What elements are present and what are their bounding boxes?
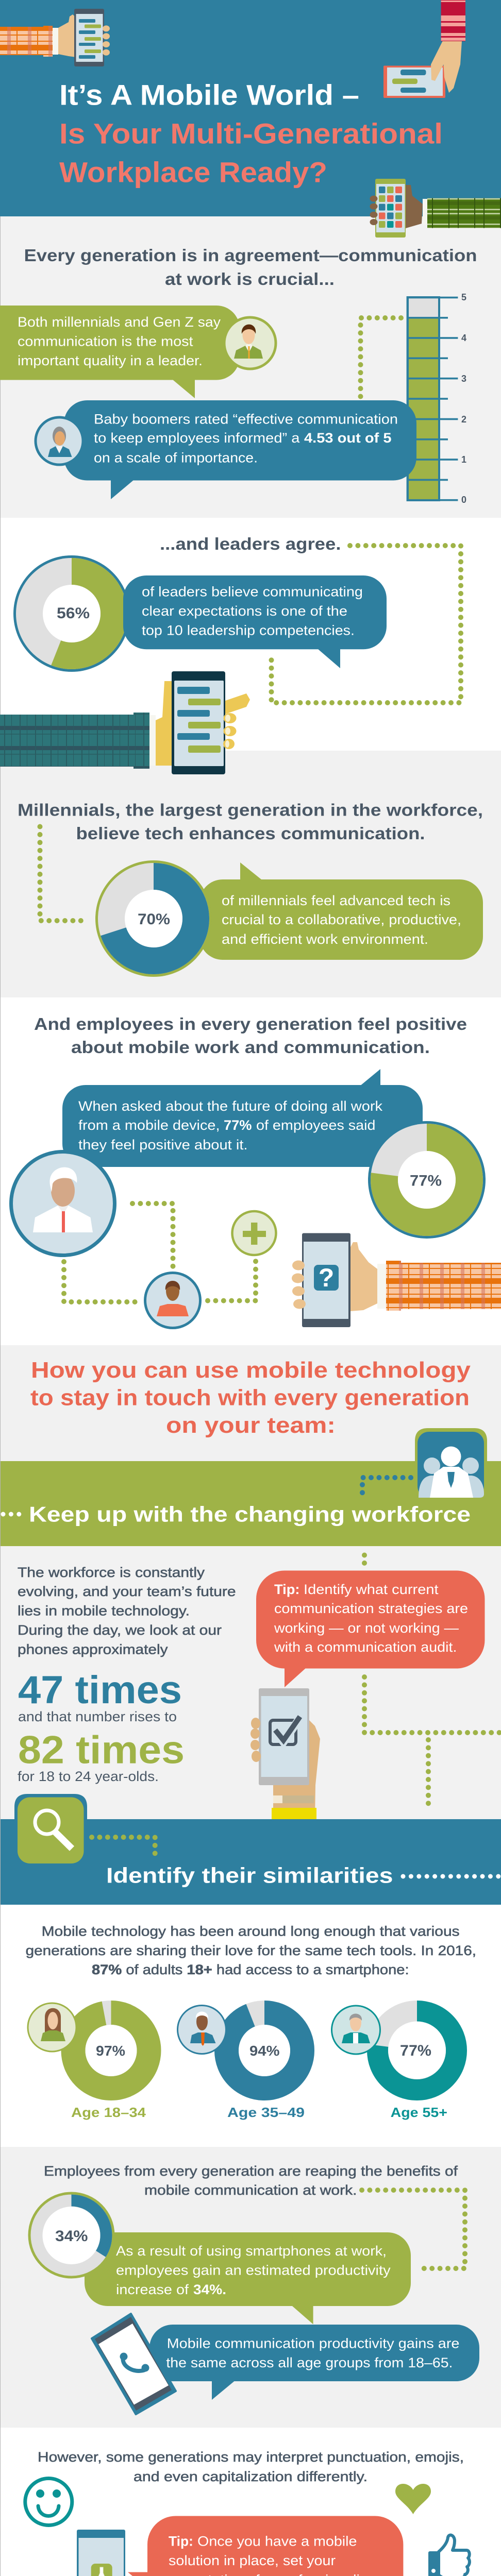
donut chart: age 55+ 77 percent [332,2001,467,2120]
donut chart: 77 percent [368,1121,486,1239]
icon: heart [395,2484,431,2514]
dotted connector: magnifier to heading [92,1837,155,1861]
icon: thumbs up [428,2535,470,2576]
callout: tip professionalism: solution in place, set your [169,2553,336,2568]
text block: mobile technology sharing [26,1924,476,1977]
callout: millennials advanced tech: and efficient work environment. [222,931,428,947]
text block: the workforce is evolving: During the day, we look at our [18,1622,222,1638]
callout: baby boomers: 4.53 out of 5 [304,430,392,446]
callout: tip professionalism [128,2516,403,2576]
callout: millennials advanced tech: crucial to a collaborative, productive, [222,912,461,927]
icon: young woman avatar [28,2003,76,2052]
text block: the workforce is evolving: The workforce is constantly [18,1565,205,1580]
heading: how you can use mobile technology [30,1358,471,1438]
donut chart: age 18-34 97 percent [28,2001,161,2120]
heading: how you can use mobile technology: How you can use mobile technology [31,1358,471,1383]
icon: man avatar with tie [177,2005,226,2054]
callout: productivity increase: 34%. [193,2282,226,2297]
text block: mobile technology sharing: 87% of adults 18+ had access to a smartphone: [92,1962,409,1977]
callout: same across age groups: Mobile communication productivity gains are [167,2336,460,2351]
callout: future of mobile work: from a mobile device, [78,1117,220,1133]
callout: future of mobile work [62,1069,423,1167]
heading: how you can use mobile technology: to stay in touch with every generation [30,1385,470,1411]
donut chart: age 55+ 77 percent: Age 55+ [391,2105,447,2120]
heading: every generation agrees [24,246,477,289]
heading: employees feel positive about mobile work [34,1014,467,1057]
heading: generations interpret differently [38,2449,464,2484]
icon: older man avatar teal [332,2006,380,2054]
chart: importance thermometer scale 0 to 5: 1 [461,454,466,465]
donut chart: 70 percent: 70% [138,911,170,928]
statistic: 82 times: for 18 to 24 year-olds. [18,1769,159,1784]
illustration: hand with striped sleeve holding phone [0,2530,125,2576]
callout: productivity increase [85,2232,411,2324]
callout: future of mobile work: of employees said [256,1117,375,1133]
icon: older woman avatar [36,417,83,465]
statistic: 47 times: 47 times [18,1668,182,1712]
icon: people team badge [415,1428,487,1498]
heading: generations interpret differently: However, some generations may interpret punctuation, emojis, [38,2449,464,2465]
dotted connector: thermometer to callout [361,318,401,397]
donut chart: age 55+ 77 percent: 77% [400,2042,431,2059]
chart: importance thermometer scale 0 to 5: 4 [461,333,466,343]
callout: productivity increase: As a result of using smartphones at work, [116,2243,387,2259]
illustration: hand with teal plaid sleeve holding chat phone [0,671,250,774]
callout: tip professionalism: Tip: [169,2533,193,2549]
illustration: dark hand with green plaid sleeve holding app phone [370,179,501,238]
callout: leaders believe: clear expectations is one of the [142,603,347,619]
heading: employees reaping benefits [44,2163,458,2198]
callout: millennials and Gen Z: important quality in a leader. [18,353,203,368]
donut chart: 77 percent: 77% [410,1173,442,1189]
icon: older man avatar [11,1152,114,1255]
heading: employees reaping benefits: Employees from every generation are reaping the benefits of [44,2163,458,2179]
heading: millennials believe tech enhances communication [18,801,483,843]
callout: millennials and Gen Z [0,306,240,398]
chart: importance thermometer scale 0 to 5: 2 [461,414,466,425]
text block: mobile technology sharing: Mobile technology has been around long enough that various [42,1924,460,1939]
callout: tip communication audit: communication strategies are [274,1601,468,1616]
heading: millennials believe tech enhances communication: Millennials, the largest generation in the workforce, [18,801,483,819]
donut chart: 56 percent: 56% [57,605,90,622]
illustration: hand with striped red sleeve holding tablet [383,0,465,98]
callout: future of mobile work: they feel positive about it. [78,1137,247,1153]
illustration: hand with orange plaid sleeve holding phone [0,9,110,66]
dotted connector: millennials heading to donut [40,826,88,921]
callout: future of mobile work: When asked about the future of doing all work [78,1098,383,1114]
callout: millennials and Gen Z: communication is the most [18,333,193,349]
callout: productivity increase: employees gain an estimated productivity [116,2263,391,2278]
callout: baby boomers: on a scale of importance. [94,450,258,466]
callout: baby boomers: Baby boomers rated “effective communication [94,411,398,427]
heading: employees reaping benefits: mobile communication at work. [144,2182,357,2198]
donut chart: 34 percent [28,2192,114,2278]
donut chart: 34 percent: 34% [55,2228,88,2245]
statistic: 47 times: and that number rises to [18,1709,177,1724]
chart: importance thermometer scale 0 to 5 [407,292,466,505]
callout: tip professionalism: Once you have a mobile [197,2533,357,2549]
callout: leaders believe: of leaders believe communicating [142,584,363,600]
title: It’s A Mobile World – [59,79,359,111]
callout: same across age groups [149,2325,479,2400]
illustration: hand with orange plaid sleeve holding question phone: ? [319,1263,334,1292]
callout: leaders believe [123,575,387,668]
icon: tilted phone with handset [92,2314,176,2414]
callout: future of mobile work: 77% [224,1117,252,1133]
callout: baby boomers [64,400,416,499]
dotted connector: team badge to heading [362,1478,411,1500]
donut chart: age 35-49 94 percent [177,2001,314,2120]
icon: woman avatar [145,1273,200,1328]
callout: leaders believe: top 10 leadership competencies. [142,622,355,638]
donut chart: age 35-49 94 percent: Age 35–49 [227,2105,305,2120]
callout: tip communication audit: working — or not working — [274,1620,459,1636]
donut chart: age 18-34 97 percent: 97% [96,2043,125,2059]
text block: the workforce is evolving: evolving, and your team’s future [18,1584,236,1599]
title: Workplace Ready? [59,156,327,189]
callout: tip communication audit: with a communication audit. [274,1639,457,1655]
statistic: 82 times: 82 times [18,1728,185,1772]
callout: millennials and Gen Z: Both millennials and Gen Z say [18,314,221,330]
donut chart: 56 percent [13,555,130,672]
section banner: identify their similarities: Identify their similarities [106,1863,393,1888]
callout: productivity increase: increase of [116,2282,189,2297]
donut chart: age 35-49 94 percent: 94% [249,2043,280,2059]
dotted connectors: people network [64,1204,256,1302]
donut chart: 70 percent [95,860,212,977]
icon: smiley face [25,2478,72,2526]
icon: young man avatar [224,317,276,369]
chart: importance thermometer scale 0 to 5: 5 [461,292,466,302]
illustration: hand with orange plaid sleeve holding question phone [292,1233,501,1327]
title: Is Your Multi-Generational [59,117,443,150]
text block: the workforce is evolving: lies in mobile technology. [18,1603,190,1619]
heading: and leaders agree: ...and leaders agree. [160,534,341,553]
callout: millennials advanced tech: of millennials feel advanced tech is [222,893,450,908]
heading: employees feel positive about mobile work: And employees in every generation feel positive [34,1014,467,1033]
heading: employees feel positive about mobile work: about mobile work and communication. [71,1038,430,1057]
heading: every generation agrees: Every generation is in agreement—communication [24,246,477,265]
text block: the workforce is evolving [18,1565,236,1657]
section banner: keep up with the changing workforce: Keep up with the changing workforce [29,1502,471,1527]
dotted connector: benefits heading to callout [362,2190,465,2268]
callout: baby boomers: to keep employees informed” a [94,430,300,446]
icon: plus sign [232,1211,276,1255]
donut chart: age 18-34 97 percent: Age 18–34 [71,2105,146,2120]
heading: every generation agrees: at work is crucial... [165,269,335,289]
dotted connector: leaders heading to phone [271,546,461,703]
text block: the workforce is evolving: phones approximately [18,1642,168,1657]
icon: magnifying glass badge [14,1794,87,1863]
heading: how you can use mobile technology: on your team: [166,1413,336,1438]
chart: importance thermometer scale 0 to 5: 0 [461,495,466,505]
heading: generations interpret differently: and even capitalization differently. [133,2469,368,2484]
chart: importance thermometer scale 0 to 5: 3 [461,374,466,384]
title [59,79,443,189]
heading: millennials believe tech enhances communication: believe tech enhances communication. [76,824,425,843]
callout: millennials advanced tech [199,862,483,960]
callout: tip communication audit [256,1570,485,1687]
callout: same across age groups: the same across all age groups from 18–65. [166,2355,453,2370]
dotted connectors: tip routing [364,1555,501,1811]
text block: mobile technology sharing: generations are sharing their love for the same tech tools. In 2016, [26,1943,476,1958]
callout: tip communication audit: Tip: [274,1582,300,1597]
illustration: hand with watch holding checkmark phone [250,1688,320,1819]
callout: tip communication audit: Identify what current [304,1582,439,1597]
